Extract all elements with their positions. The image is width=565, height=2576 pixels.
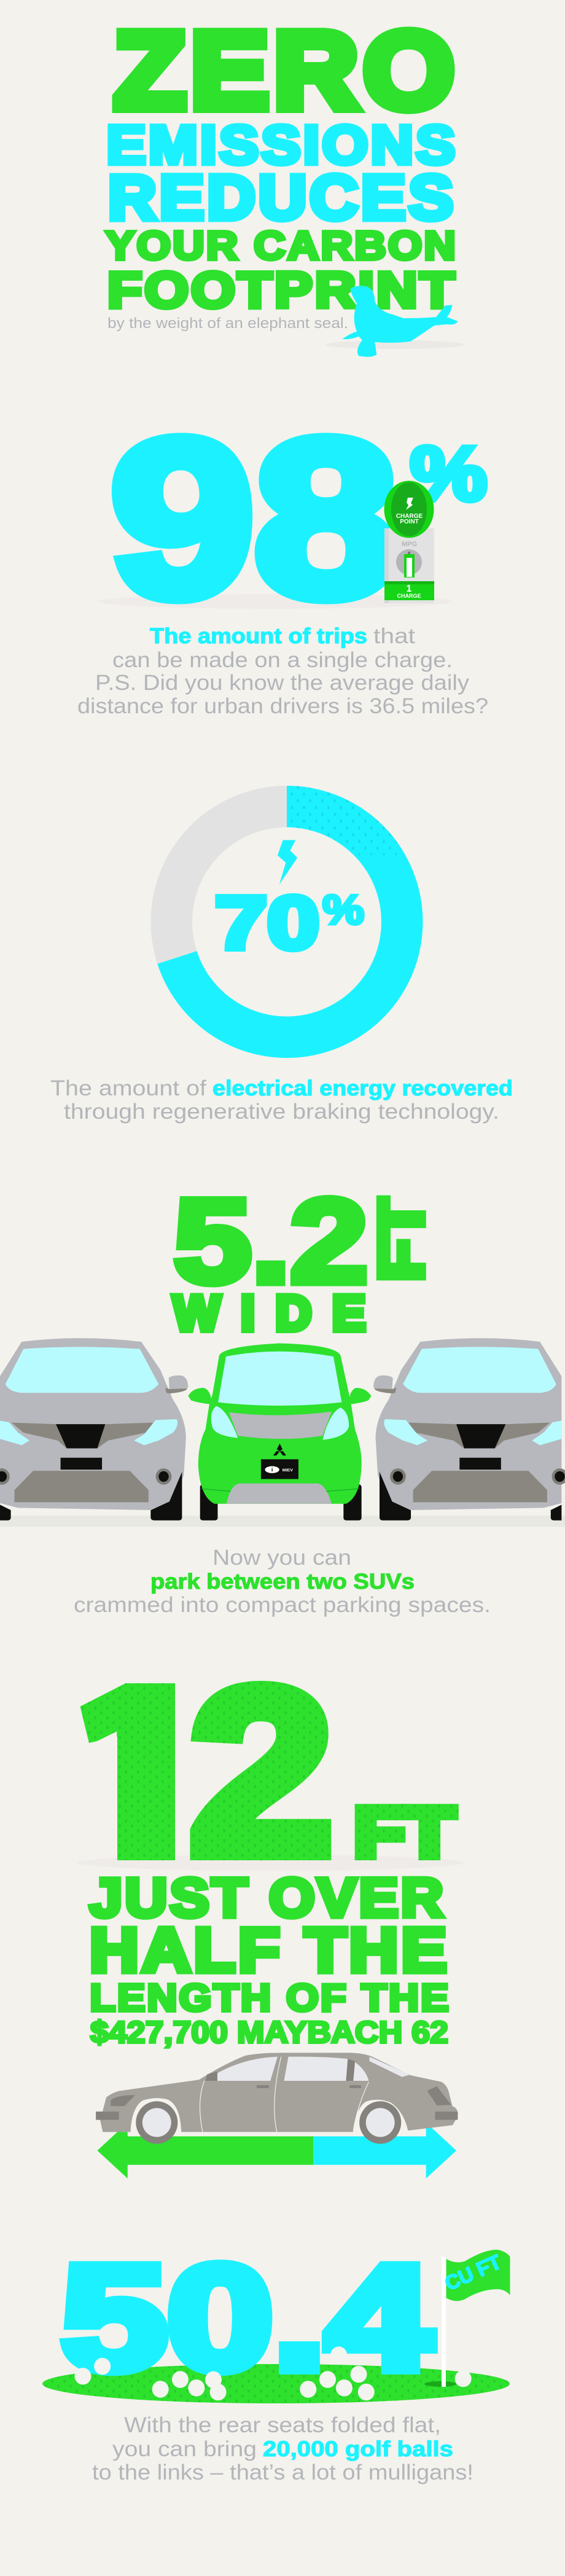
text block: golf balls: 20,000 golf balls <box>263 2437 453 2461</box>
big number 12: 2 <box>189 1640 333 1903</box>
heading: length comparison: $427,700 MAYBACH 62 <box>90 2015 448 2049</box>
text block: parking: park between two SUVs <box>150 1570 415 1594</box>
text block: trips: The amount of trips <box>150 624 367 648</box>
text block: parking: Now you can <box>212 1546 351 1570</box>
car: green i-MiEV: MIEV <box>282 1469 294 1473</box>
big number 12: 1 <box>56 1640 222 1903</box>
hole <box>424 2381 456 2387</box>
text block: trips: distance for urban drivers is 36.5 miles? <box>77 694 488 718</box>
panel: 50.4 cu ft <box>42 2235 510 2484</box>
car: Maybach side view <box>96 2053 458 2143</box>
icon: charge point device: CHARGE <box>397 593 421 599</box>
title: ZERO <box>114 10 459 131</box>
flag with CU FT: CU FT <box>442 2250 505 2295</box>
icon: charge point device: MPG <box>402 541 417 548</box>
text block: regenerative braking: electrical energy recovered <box>212 1076 513 1100</box>
text block: trips: P.S. Did you know the average daily <box>95 671 470 695</box>
title: YOUR CARBON <box>106 223 458 268</box>
panel: 12 ft <box>80 1681 459 2179</box>
icon: bolt <box>278 840 297 885</box>
FT unit: FT <box>354 1793 454 1871</box>
green with balls backdrop <box>42 2364 510 2403</box>
text block: regenerative braking <box>50 1076 513 1124</box>
text block: parking <box>74 1546 491 1617</box>
flag pole <box>442 2257 446 2387</box>
icon: charge point device <box>384 480 434 603</box>
heading: length comparison: HALF THE <box>90 1916 450 1985</box>
big number 5.2: 5.2 <box>174 1175 368 1308</box>
text block: golf balls: to the links – that’s a lot of mulligans! <box>92 2461 473 2484</box>
percent sign: % <box>410 431 487 517</box>
title: EMISSIONS <box>107 114 458 175</box>
title: FOOTPRINT <box>107 262 457 318</box>
arrow: length bar <box>97 2123 456 2179</box>
heading: length comparison <box>90 1867 451 2049</box>
icon: charge point device: POINT <box>400 519 419 525</box>
panel: 5.2 ft wide <box>0 1175 565 1617</box>
big number 98: 98 <box>111 393 398 643</box>
text block: golf balls <box>92 2413 473 2484</box>
heading: length comparison: JUST OVER <box>90 1867 446 1928</box>
text block: golf balls: you can bring <box>112 2437 257 2461</box>
heading: length comparison: LENGTH OF THE <box>90 1976 451 2019</box>
icon: charge point device: 1 <box>407 584 412 594</box>
car: right SUV <box>373 1338 565 1521</box>
donut value: % <box>322 887 364 933</box>
text block: golf balls: With the rear seats folded flat, <box>124 2413 441 2437</box>
WIDE label: WIDE <box>173 1286 365 1341</box>
icon: seal <box>325 286 464 357</box>
ground shadow <box>0 1516 565 1527</box>
text block: regenerative braking: The amount of <box>50 1076 206 1100</box>
text block: trips <box>77 624 488 718</box>
car: green i-MiEV: i <box>271 1467 273 1473</box>
donut value <box>215 881 364 965</box>
text block: parking: crammed into compact parking spaces. <box>74 1593 491 1617</box>
text block: regenerative braking: through regenerative braking technology. <box>64 1100 499 1124</box>
subtitle: by the weight of an elephant seal. <box>107 315 348 332</box>
title: REDUCES <box>108 163 456 233</box>
icon: charge point device: CHARGE <box>396 513 423 520</box>
panel: 98 percent <box>77 393 488 718</box>
big number 12 <box>80 1681 332 1860</box>
car: green i-MiEV <box>188 1344 372 1521</box>
text block: trips: can be made on a single charge. <box>112 648 453 672</box>
panel: 70 percent <box>50 786 513 1124</box>
big number 50.4: 50.4 <box>61 2235 432 2401</box>
car: left SUV <box>0 1338 188 1521</box>
rotated FT unit: FT <box>367 1199 436 1281</box>
number shadow <box>77 1855 464 1871</box>
title <box>106 10 459 318</box>
golf balls <box>74 2347 472 2400</box>
donut chart <box>150 786 423 1058</box>
text block: trips: that <box>373 624 415 648</box>
big number shadow <box>98 594 452 609</box>
donut value: 70 <box>215 881 319 965</box>
